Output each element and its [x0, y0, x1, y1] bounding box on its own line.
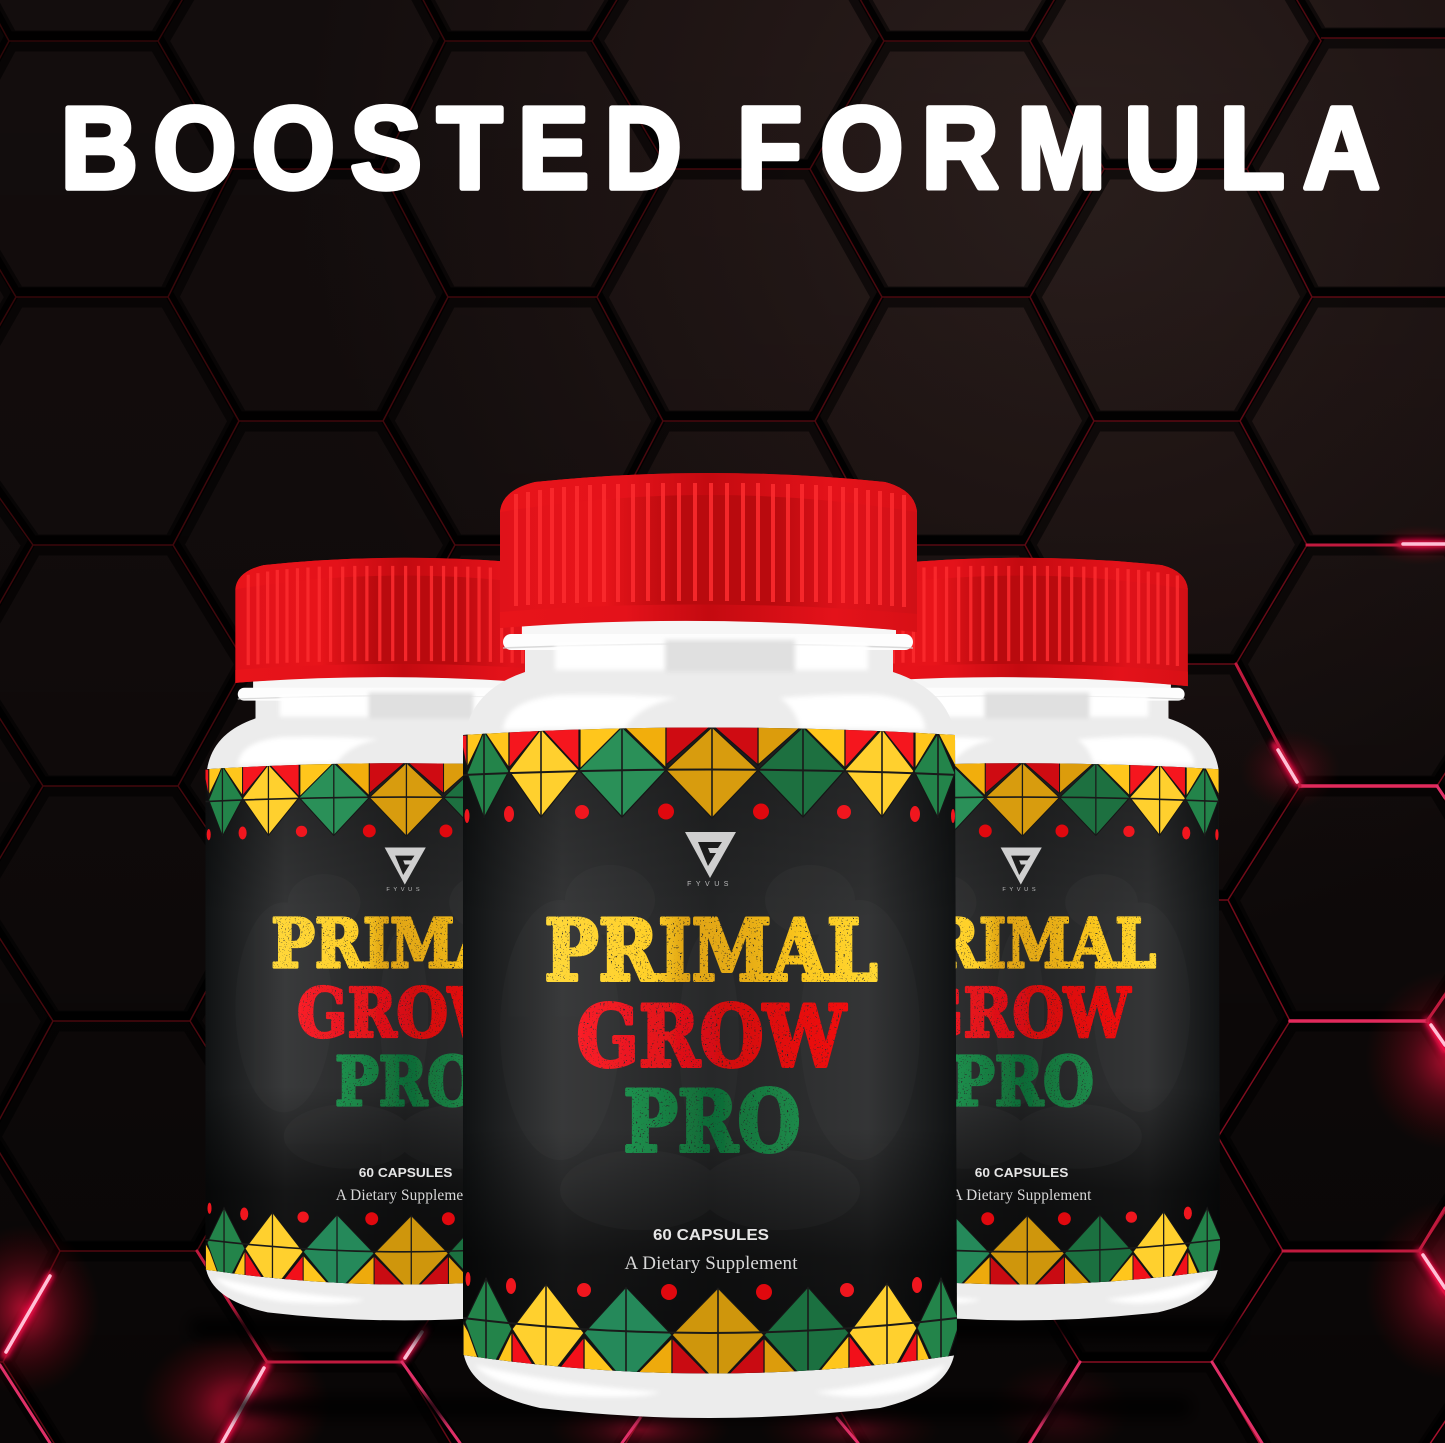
- bottle text: right: PRIMAL: [887, 903, 1156, 983]
- bottle text: left: [271, 887, 540, 1204]
- bottle text: left: FYVUS: [386, 887, 423, 893]
- bottle text: left: GROW: [297, 972, 515, 1052]
- bottle text: right: GROW: [913, 972, 1131, 1052]
- bottle text: centre: PRO: [624, 1072, 800, 1171]
- bottle text: right: A Dietary Supplement: [952, 1187, 1092, 1204]
- bottle text: right: FYVUS: [1002, 887, 1039, 893]
- bottle text: centre: 60 CAPSULES: [653, 1227, 769, 1244]
- glowing neon hex edges: [0, 544, 1445, 1443]
- title: BOOSTED: [61, 83, 682, 213]
- bottle floor shadows: [190, 1318, 1240, 1416]
- bottle text: right: 60 CAPSULES: [975, 1165, 1069, 1180]
- bottle text: centre: FYVUS: [687, 881, 733, 888]
- bottle text: centre: GROW: [576, 987, 847, 1086]
- bottle text: left: PRO: [335, 1041, 478, 1121]
- bottle: right: [819, 558, 1223, 1320]
- bottle text: left: 60 CAPSULES: [359, 1165, 453, 1180]
- bottle: centre: [460, 473, 960, 1418]
- bottle text: left: PRIMAL: [271, 903, 540, 983]
- bottle text: centre: A Dietary Supplement: [624, 1253, 798, 1274]
- bottle text: right: [887, 887, 1156, 1204]
- bottle text: right: PRO: [951, 1041, 1094, 1121]
- title: [61, 83, 1380, 213]
- bottle text: centre: [544, 881, 878, 1274]
- title: FORMULA: [737, 83, 1380, 213]
- bottle text: centre: PRIMAL: [544, 901, 878, 1000]
- bottle: left: [203, 558, 607, 1320]
- bottle text: left: A Dietary Supplement: [336, 1187, 476, 1204]
